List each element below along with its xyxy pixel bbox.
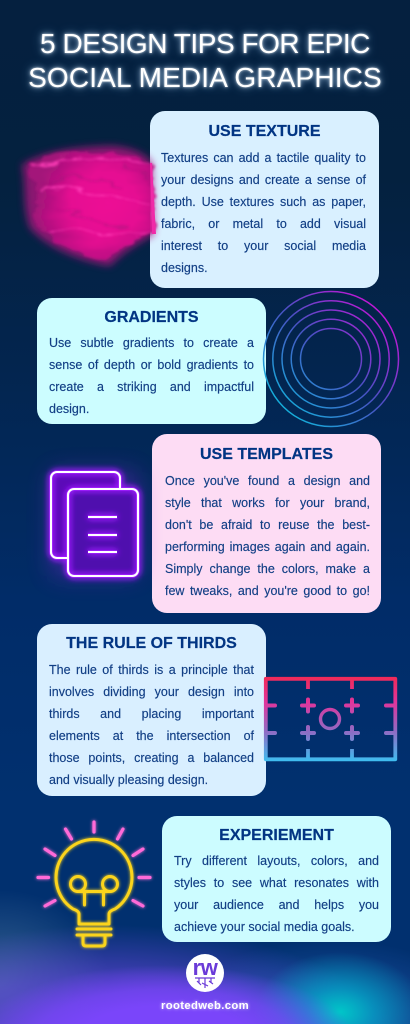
text: experiment: achieve your social media goals.	[174, 920, 355, 934]
text: experiment: your audience and helps you	[174, 898, 379, 912]
text: use texture: fabric, or metal to add visual	[161, 217, 366, 231]
logo letters: rw	[193, 955, 217, 980]
bulb outline and filament	[56, 839, 132, 946]
title	[26, 28, 385, 93]
heading: gradients: GRADIENTS	[104, 309, 199, 326]
logo	[186, 954, 224, 992]
text: the rule of thirds	[49, 663, 254, 787]
text: experiment: styles to see what resonates with	[174, 876, 379, 890]
text: gradients	[49, 336, 254, 416]
heading: use templates: USE TEMPLATES	[200, 446, 333, 463]
website address: rootedweb.com	[161, 1000, 249, 1012]
panel: gradients	[37, 298, 266, 424]
text: experiment: Try different layouts, colors, and	[174, 854, 379, 868]
text: the rule of thirds: and visually pleasing design.	[49, 773, 208, 787]
icon: neon documents	[40, 460, 153, 588]
text: gradients: Use subtle gradients to create a	[49, 336, 254, 350]
icon: rule of thirds grid	[264, 676, 398, 762]
text: gradients: design.	[49, 402, 89, 416]
text: use templates: few tweaks, and you're good to go!	[165, 584, 370, 598]
text: use texture	[161, 151, 366, 275]
text: use texture: Textures can add a tactile quality to	[161, 151, 366, 165]
text: experiment	[174, 854, 379, 934]
text: the rule of thirds: thirds and placing important	[49, 707, 254, 721]
bulb rays	[38, 822, 150, 906]
text: use templates: don't be afraid to reuse the best-	[165, 518, 370, 532]
text: use templates: style that works for your brand,	[165, 496, 370, 510]
text: use texture: depth. Use textures such as paper,	[161, 195, 366, 209]
text: gradients: create a striking and impactful	[49, 380, 254, 394]
panel: experiment	[162, 816, 391, 942]
text: the rule of thirds: involves dividing your design into	[49, 685, 254, 699]
heading: the rule of thirds: THE RULE OF THIRDS	[66, 635, 237, 652]
title: SOCIAL MEDIA GRAPHICS	[28, 62, 382, 93]
panel: the rule of thirds	[37, 624, 266, 796]
icon: concentric gradient rings	[262, 290, 400, 428]
icon: neon light bulb	[34, 818, 154, 950]
heading: use texture: USE TEXTURE	[208, 123, 320, 140]
heading: experiment: EXPERIEMENT	[219, 827, 334, 844]
text: use texture: interest to your social media	[161, 239, 366, 253]
text: use texture: your designs and create a sense of	[161, 173, 366, 187]
text: use templates	[165, 474, 370, 598]
logo roots	[195, 977, 215, 988]
text: the rule of thirds: The rule of thirds is a principle that	[49, 663, 254, 677]
text: use texture: designs.	[161, 261, 208, 275]
icon: pink paint texture	[18, 140, 160, 271]
text: the rule of thirds: elements at the intersection of	[49, 729, 254, 743]
panel: use templates	[152, 434, 381, 613]
title: 5 DESIGN TIPS FOR EPIC	[40, 28, 370, 59]
text: gradients: sense of depth or bold gradients to	[49, 358, 254, 372]
text: use templates: Simply change the colors, make a	[165, 562, 370, 576]
text: use templates: Once you've found a design and	[165, 474, 370, 488]
text: the rule of thirds: those points, creating a balanced	[49, 751, 254, 765]
panel: use texture	[150, 111, 379, 288]
text: use templates: performing images again and again.	[165, 540, 370, 554]
